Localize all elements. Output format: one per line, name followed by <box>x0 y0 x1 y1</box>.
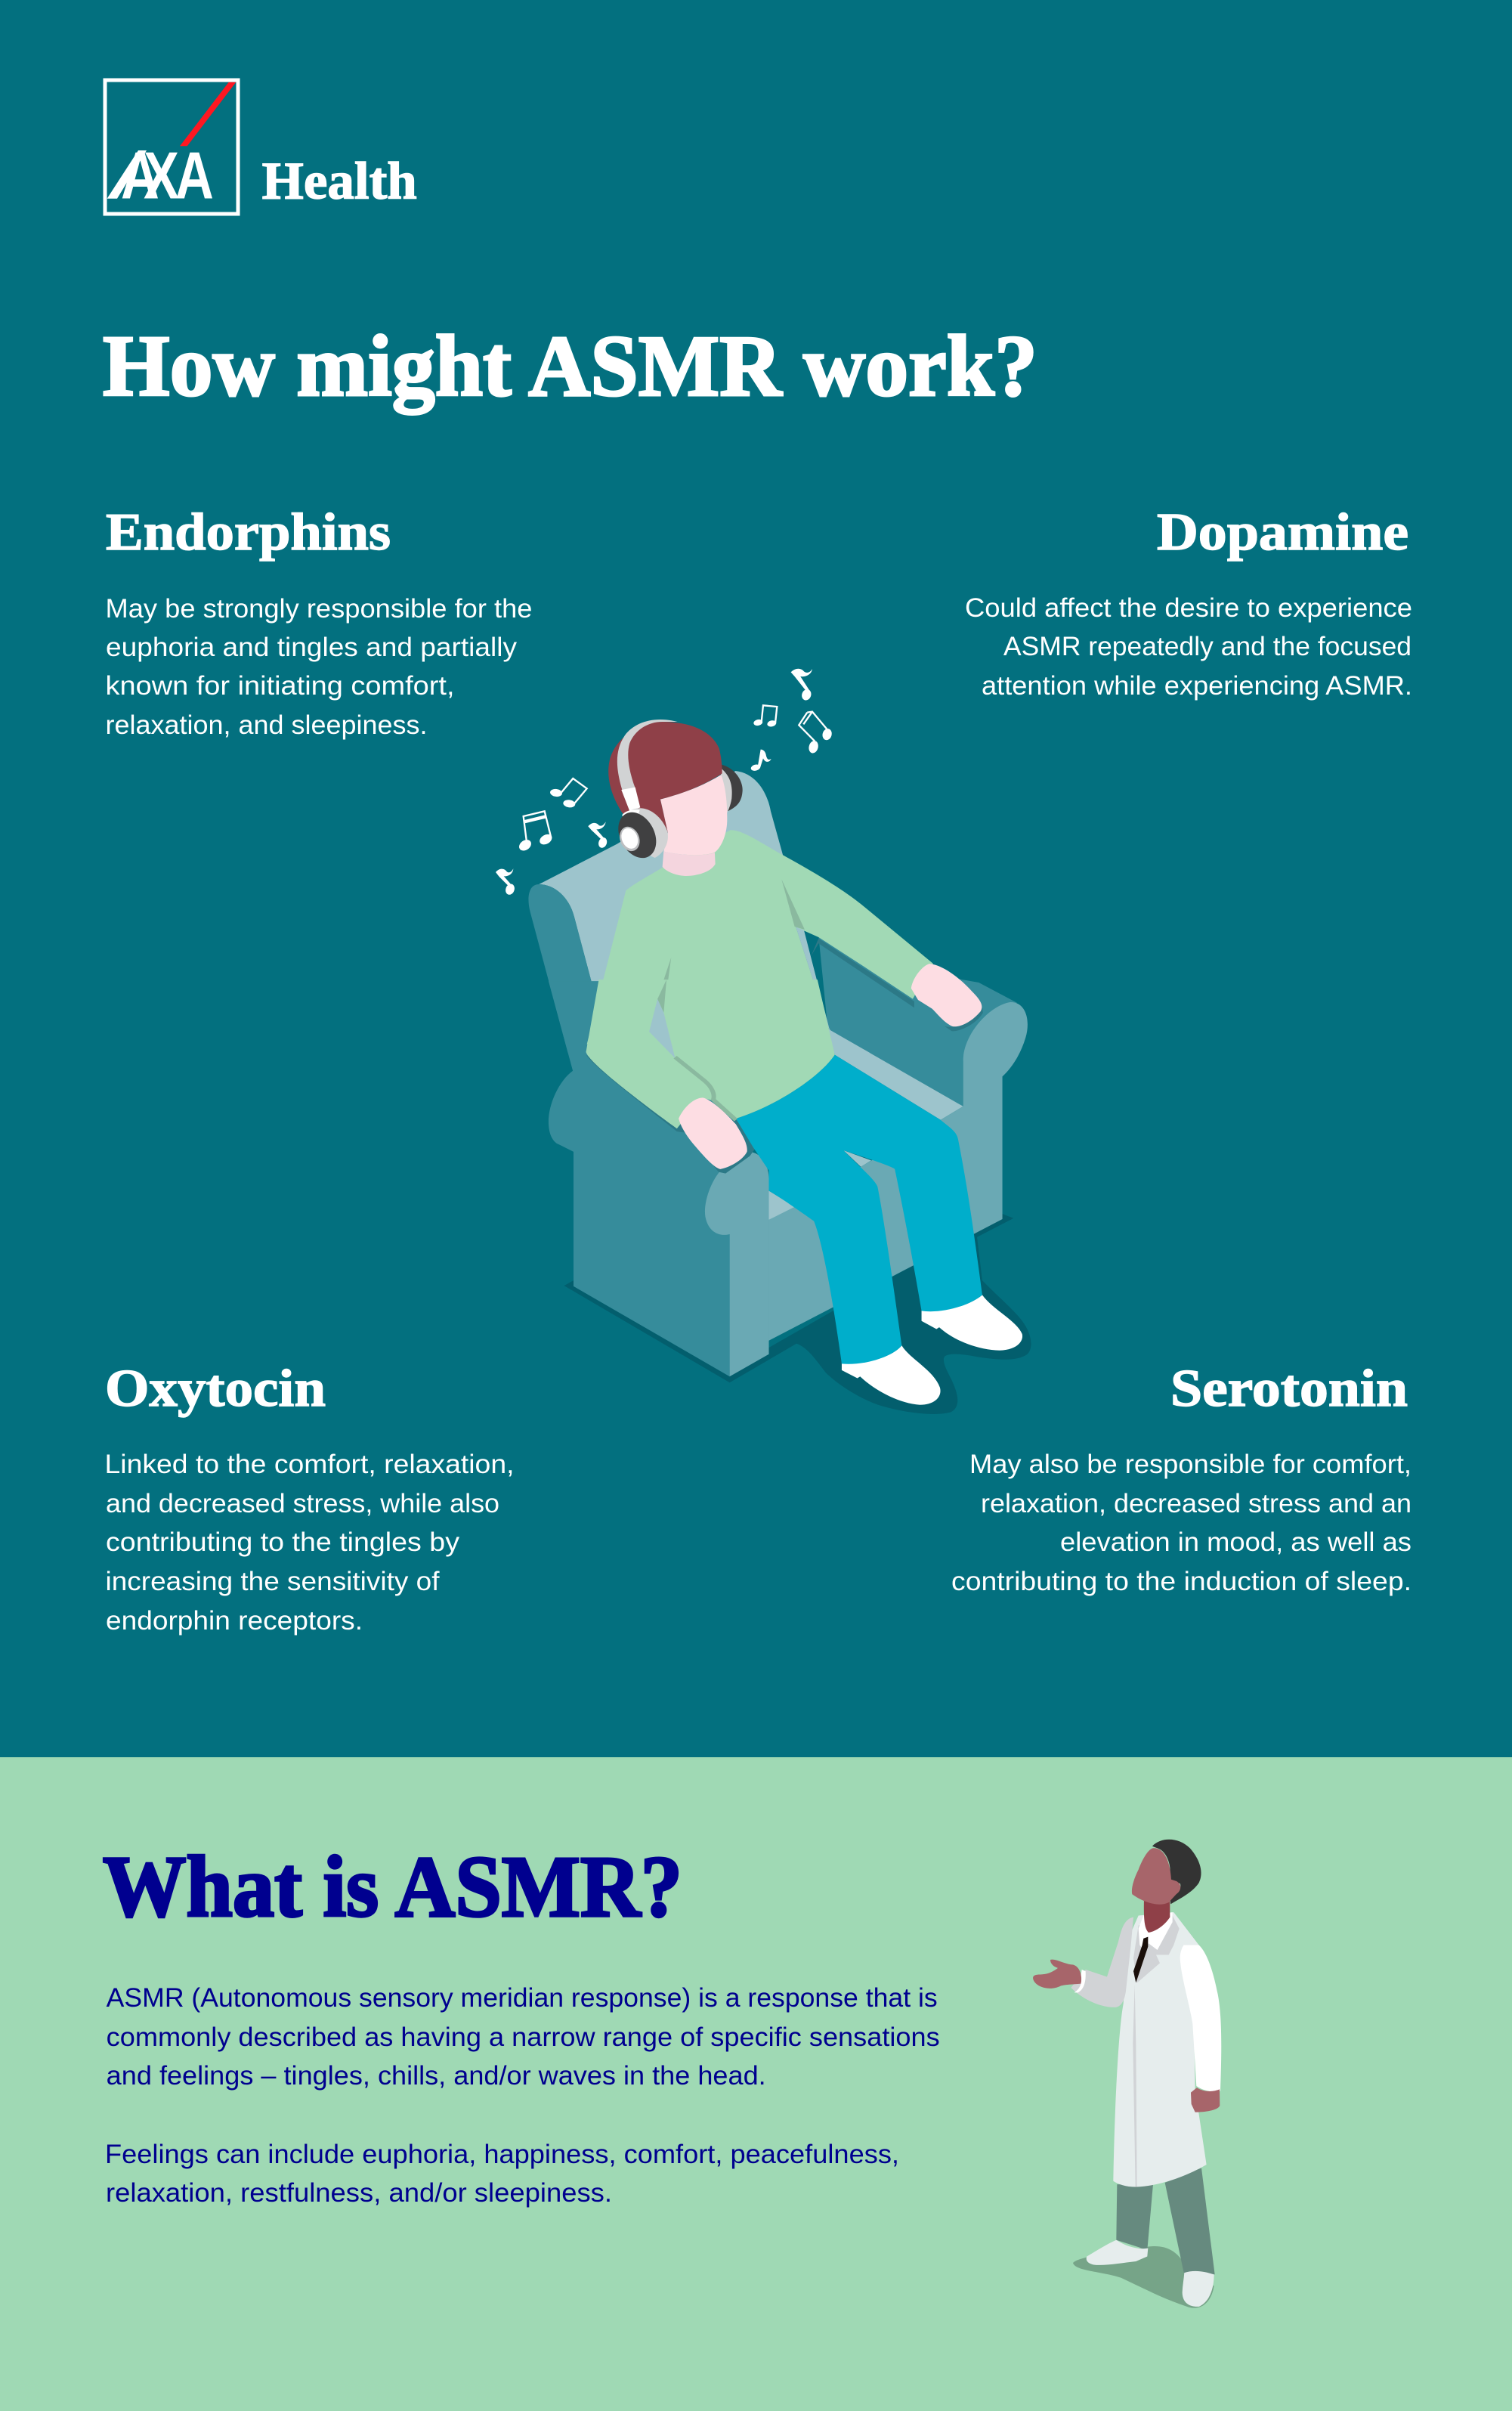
lab coat <box>1113 1912 1207 2187</box>
panel: serotonin: relaxation, decreased stress and an <box>981 1488 1412 1518</box>
text block: ASMR definition: and feelings – tingles, chills, and/or waves in the head. <box>107 2060 766 2091</box>
illustration: man in armchair with headphones <box>496 669 1031 1414</box>
panel: endorphins <box>106 503 532 740</box>
shoes <box>842 1295 1022 1405</box>
far ear cup <box>720 765 743 814</box>
jumper upper <box>587 830 933 1045</box>
panel: dopamine: Dopamine <box>1157 503 1408 562</box>
left hand <box>679 1097 747 1169</box>
panel: serotonin: contributing to the induction of sleep. <box>951 1566 1412 1596</box>
panel: endorphins: relaxation, and sleepiness. <box>106 710 428 740</box>
illustration: doctor <box>1033 1840 1221 2308</box>
trousers <box>736 1055 982 1364</box>
raised hand <box>1033 1960 1081 1989</box>
lower hand <box>1191 2088 1220 2112</box>
face <box>1132 1848 1180 1905</box>
right hand <box>944 1007 983 1031</box>
text block: ASMR definition: commonly described as having a narrow range of specific sensations <box>107 2022 940 2052</box>
jumper lower <box>586 964 983 1169</box>
panel: oxytocin: Oxytocin <box>105 1360 326 1418</box>
panel: oxytocin: Linked to the comfort, relaxation, <box>104 1449 514 1479</box>
panel: dopamine: ASMR repeatedly and the focused <box>1003 631 1412 661</box>
panel: dopamine: attention while experiencing ASMR. <box>982 670 1412 701</box>
panel: dopamine: Could affect the desire to experience <box>965 593 1412 623</box>
panel: endorphins: known for initiating comfort, <box>106 670 455 701</box>
lapels <box>1133 1915 1180 1982</box>
chair body <box>549 935 1028 1376</box>
front arm of chair <box>705 1152 769 1376</box>
panel: oxytocin <box>104 1360 514 1636</box>
hair <box>1152 1840 1201 1904</box>
panel: dopamine <box>965 503 1412 701</box>
panel: serotonin <box>951 1360 1412 1596</box>
neck <box>1144 1898 1170 1933</box>
logo: AXA Health: Health <box>262 153 417 211</box>
text block: ASMR definition: relaxation, restfulness, and/or sleepiness. <box>106 2177 612 2208</box>
panel: endorphins: euphoria and tingles and partially <box>106 632 517 662</box>
panel: oxytocin: contributing to the tingles by <box>106 1527 459 1557</box>
doctor shoes <box>1087 2240 1214 2307</box>
doctor shadow <box>1073 2246 1214 2308</box>
panel: oxytocin: and decreased stress, while also <box>106 1488 499 1518</box>
panel: endorphins: Endorphins <box>106 503 391 562</box>
panel: serotonin: May also be responsible for comfort, <box>969 1449 1412 1479</box>
text block: ASMR definition: ASMR (Autonomous sensory meridian response) is a response that is <box>107 1982 938 2013</box>
panel: serotonin: elevation in mood, as well as <box>1060 1527 1412 1557</box>
text block: ASMR definition <box>105 1982 940 2208</box>
heading: what is ASMR: What is ASMR? <box>103 1839 682 1935</box>
panel: endorphins: May be strongly responsible for the <box>106 593 532 624</box>
head with headphones <box>608 720 727 876</box>
logo: AXA Health <box>105 80 417 214</box>
title: How might ASMR work? <box>103 318 1037 414</box>
shirt collar <box>1139 1912 1173 1951</box>
white sleeve <box>1180 1945 1221 2091</box>
chair back <box>528 771 871 1053</box>
logo: AXA Health: AXA <box>121 138 214 212</box>
tie <box>1133 1937 1148 1982</box>
trousers <box>1116 2168 1215 2274</box>
music notes <box>496 669 833 896</box>
chair and feet shadow <box>564 1214 1031 1414</box>
coat placket <box>1133 1985 1137 2187</box>
panel: oxytocin: increasing the sensitivity of <box>106 1566 440 1596</box>
cuff <box>1074 1970 1086 1992</box>
panel: oxytocin: endorphin receptors. <box>106 1605 363 1636</box>
panel: serotonin: Serotonin <box>1170 1360 1408 1418</box>
outstretched sleeve <box>1071 1917 1133 2007</box>
text block: ASMR definition: Feelings can include euphoria, happiness, comfort, peacefulness, <box>105 2139 899 2169</box>
